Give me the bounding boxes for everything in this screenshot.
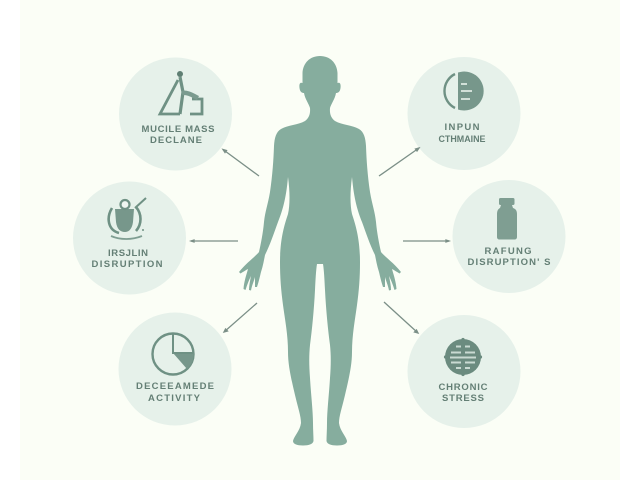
arrow: to chronic stress: [384, 302, 418, 333]
label: muscle mass decline: DECLANE: [150, 135, 202, 146]
arrow: to input chemical: [379, 148, 419, 176]
icon: round emblem: [444, 338, 482, 376]
label: rafung disruptions: RAFUNG: [484, 246, 532, 257]
label: input chemical: INPUN: [444, 122, 480, 133]
panel: rafung disruptions: [452, 180, 566, 293]
label: decreased activity: [136, 381, 214, 404]
label: input chemical: CTHMAINE: [438, 134, 486, 145]
arrow: to insulin disruption: [191, 240, 238, 242]
label: insulin disruption: IRSJLIN: [108, 248, 148, 259]
label: input chemical: [438, 122, 486, 145]
label: chronic stress: [438, 382, 488, 404]
panel: decreased activity: [118, 312, 232, 426]
label: muscle mass decline: [142, 124, 214, 146]
icon: cup with spoon: [109, 198, 146, 239]
arrow: to rafung disruptions: [403, 240, 449, 242]
icon: person on incline: [160, 71, 202, 114]
label: chronic stress: CHRONIC: [438, 382, 488, 393]
panel: muscle mass decline: [119, 58, 232, 170]
icon: half-filled circle: [444, 72, 484, 110]
panel: insulin disruption: [73, 182, 186, 294]
label: insulin disruption: [92, 248, 163, 270]
label: muscle mass decline: MUCILE MASS: [142, 124, 214, 135]
label: decreased activity: ACTIVITY: [148, 393, 201, 404]
label: rafung disruptions: [468, 246, 550, 268]
label: chronic stress: STRESS: [442, 393, 484, 404]
icon: bottle: [497, 198, 517, 240]
arrow: to muscle mass decline: [223, 150, 259, 176]
arrow: to decreased activity: [224, 303, 257, 332]
icon: pie clock: [152, 334, 194, 374]
panel: chronic stress: [408, 315, 520, 428]
label: rafung disruptions: DISRUPTION' S: [468, 257, 550, 268]
label: decreased activity: DECEEAMEDE: [136, 381, 214, 392]
label: insulin disruption: DISRUPTION: [92, 259, 163, 270]
human body silhouette: [239, 56, 401, 446]
panel: input chemical: [408, 57, 520, 170]
